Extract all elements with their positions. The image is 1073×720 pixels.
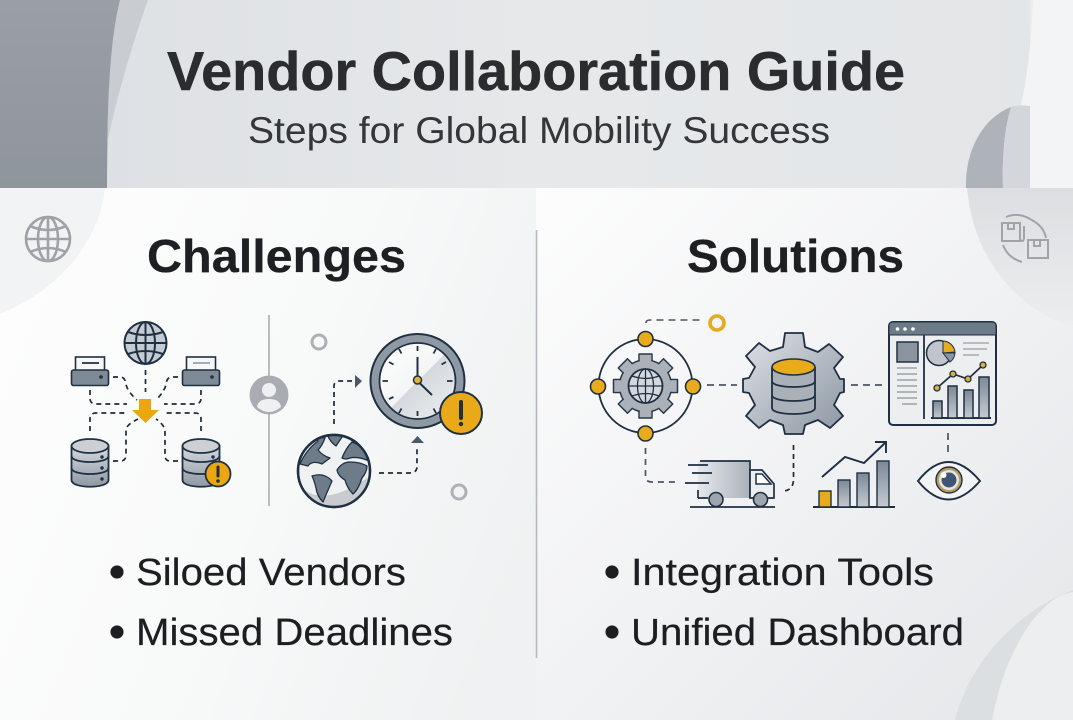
list: solutions [606,552,964,654]
header band [0,0,1073,188]
icon: earth globe [298,434,370,508]
icon: eye [918,462,980,500]
list: challenges [110,552,453,654]
icon: clock with alert [370,334,482,434]
diagram divider with person icon [250,315,288,506]
panel: solutions [536,188,1073,720]
icon: database gear [743,333,844,434]
heading: solutions: Solutions [687,230,904,282]
icon: growth bar chart [813,442,895,507]
list: solutions: Unified Dashboard [631,612,964,654]
icon: right database with alert [182,439,230,487]
title: Vendor Collaboration Guide [167,40,905,102]
arrow: globe to clock base [379,436,424,473]
panel: challenges [0,188,536,720]
diagram: integration orbit [590,316,724,441]
icon: delivery truck [685,461,775,507]
icon: gold ring [710,316,724,330]
list: challenges: Siloed Vendors [136,552,406,594]
connectors [646,385,948,491]
icon: right printer [182,357,220,386]
arrow: globe to clock [334,375,362,424]
icon: central down arrow [132,399,159,423]
icon: orbit gear with globe [614,354,678,418]
diagram: siloed vendors network [72,322,230,487]
orbit nodes [590,332,700,441]
small rings [312,335,466,499]
panel divider [536,230,538,658]
icon: dashboard window [889,322,996,425]
icon: person [250,376,288,414]
subtitle: Steps for Global Mobility Success [248,110,830,151]
icon: network globe [124,322,166,364]
list: solutions: Integration Tools [631,552,934,594]
icon: corner globe [26,217,70,261]
dashed connectors [90,370,201,461]
heading: challenges: Challenges [147,230,406,282]
list: challenges: Missed Deadlines [136,612,453,654]
icon: left database [72,439,108,487]
icon: clock alert [440,392,482,434]
icon: corner logistics [1002,215,1048,262]
icon: left printer [72,357,108,386]
